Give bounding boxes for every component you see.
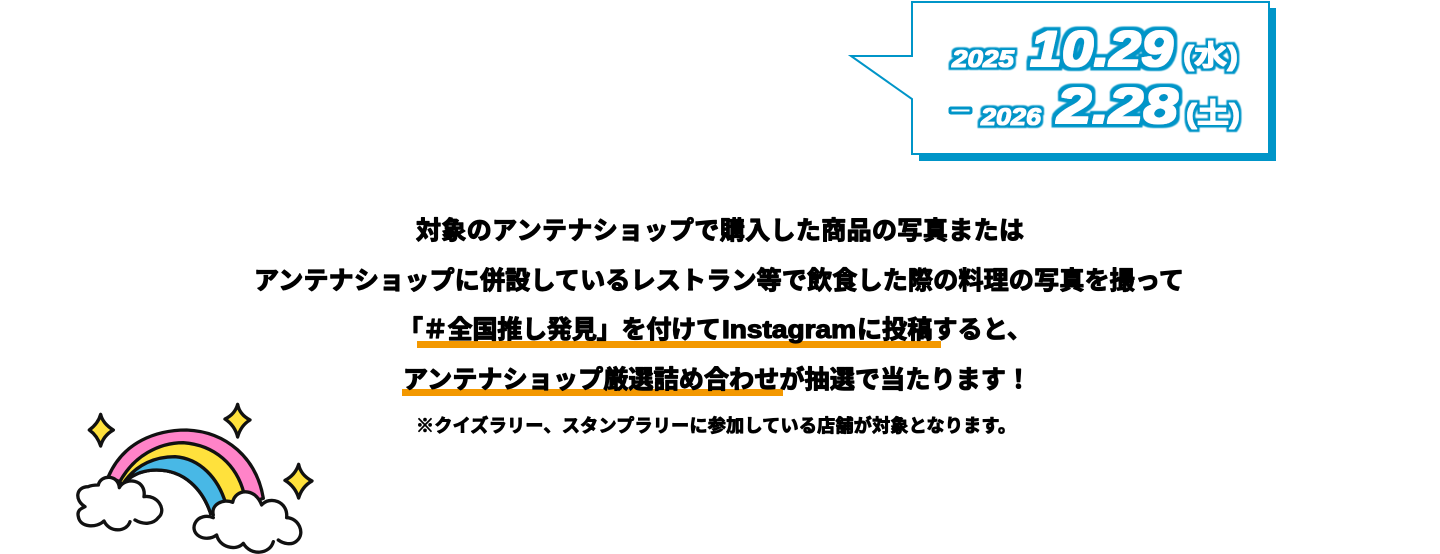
underline: hashtag [417,341,941,348]
sparkle top [225,404,250,437]
text line 2: アンテナショップに併設しているレストラン等で飲食した際の料理の写真を撮って [254,267,1184,295]
start date [951,21,1238,77]
icon: rainbow with clouds and sparkles [78,404,312,552]
start date: 2025 [951,46,1015,73]
bubble shadow [919,8,1276,161]
right cloud [194,492,301,552]
text line 3: 「＃全国推し発見」を付けて [398,316,721,344]
text line 4: アンテナショップ厳選詰め合わせが抽選で当たります！ [403,365,1031,394]
dash [950,108,971,113]
date speech bubble [851,2,1276,161]
start date: (水) [1183,40,1238,71]
text line 1: 対象のアンテナショップで購入した商品の写真または [416,217,1024,245]
underline: prize [402,389,783,396]
end date: (土) [1186,98,1240,129]
footnote: ※クイズラリー、スタンプラリーに参加している店舗が対象となります。 [416,415,1016,436]
start date: 10.29 [1030,21,1173,77]
sparkle right [285,464,312,498]
end date: 2026 [980,104,1042,131]
sparkle left [89,414,113,446]
left cloud [78,477,162,530]
description text block [254,217,1184,436]
text line 3 [398,316,1032,344]
bubble outline with tail [851,2,1269,154]
text line 3: Instagram [722,316,856,344]
end date: 2.28 [1056,78,1178,134]
end date [950,78,1240,134]
rainbow arcs [108,430,263,517]
text line 3: に投稿すると、 [857,316,1032,344]
